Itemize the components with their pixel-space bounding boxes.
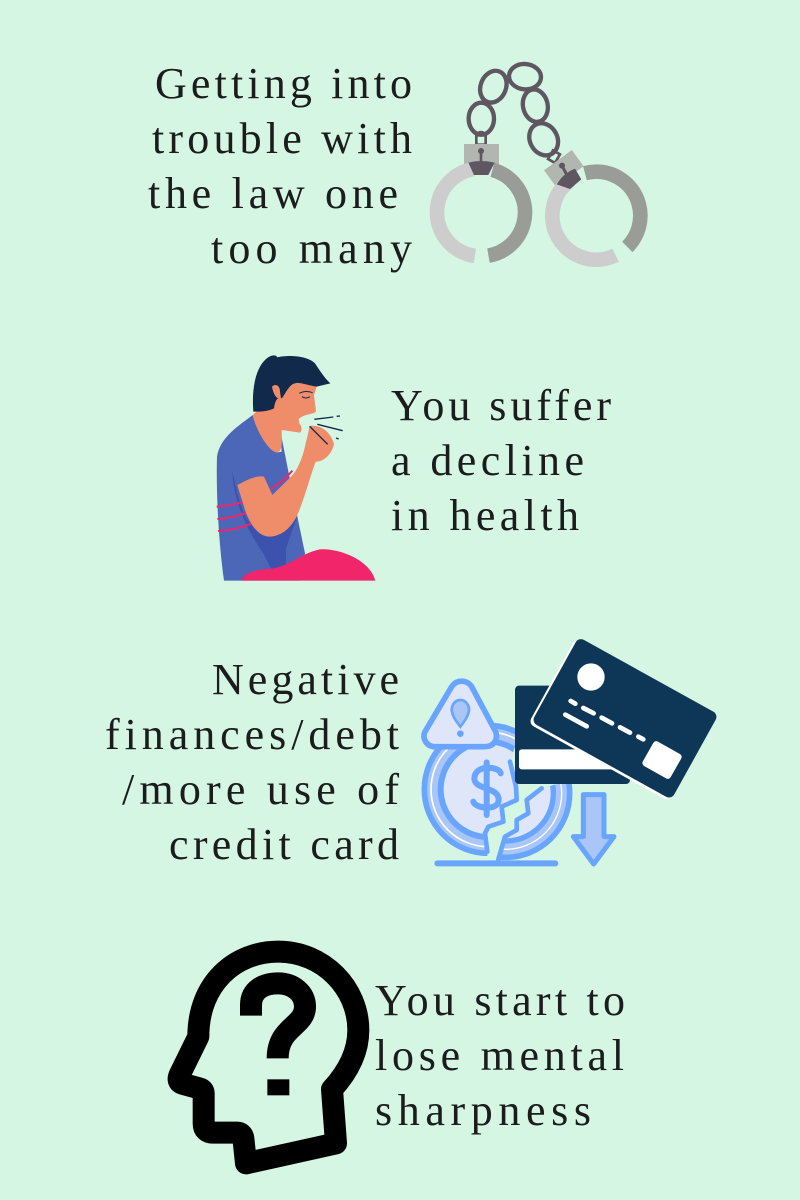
neck and face (253, 382, 317, 453)
text: negative finances (105, 655, 399, 869)
text: negative finances: Negative (212, 655, 399, 704)
icon: man coughing (217, 355, 375, 581)
text: getting into trouble: the law one (148, 169, 398, 218)
hair (253, 355, 330, 412)
text: getting into trouble: trouble with (152, 114, 412, 163)
text: getting into trouble: too many (211, 224, 412, 273)
text: decline in health: a decline (391, 436, 584, 485)
text: decline in health: in health (391, 491, 579, 540)
front card (528, 636, 719, 802)
text: negative finances: /more use of (122, 765, 399, 814)
arm (237, 440, 333, 537)
shirt (217, 415, 305, 581)
text: negative finances: finances/debt (105, 710, 399, 759)
pink stripes (217, 471, 292, 531)
pink cushion (242, 549, 375, 581)
eyebrow and eye (299, 391, 313, 398)
text: getting into trouble: Getting into (155, 59, 412, 108)
shirt shade (232, 472, 298, 570)
icon: head with question mark (179, 952, 358, 1163)
icon: broken coin and credit cards (424, 636, 719, 864)
text: mental sharpness: sharpness (375, 1086, 591, 1135)
arrow down (573, 795, 614, 864)
text: mental sharpness: lose mental (375, 1031, 624, 1080)
text: negative finances: credit card (169, 820, 399, 869)
icon: handcuffs (427, 63, 655, 274)
warning triangle (424, 681, 496, 747)
text: mental sharpness (375, 976, 625, 1135)
text: decline in health (391, 381, 611, 540)
text: decline in health: You suffer (391, 381, 611, 430)
text: mental sharpness: You start to (375, 976, 625, 1025)
text: getting into trouble (148, 59, 412, 273)
back card (515, 686, 630, 784)
cough lines (310, 416, 343, 444)
broken coin (424, 725, 570, 863)
